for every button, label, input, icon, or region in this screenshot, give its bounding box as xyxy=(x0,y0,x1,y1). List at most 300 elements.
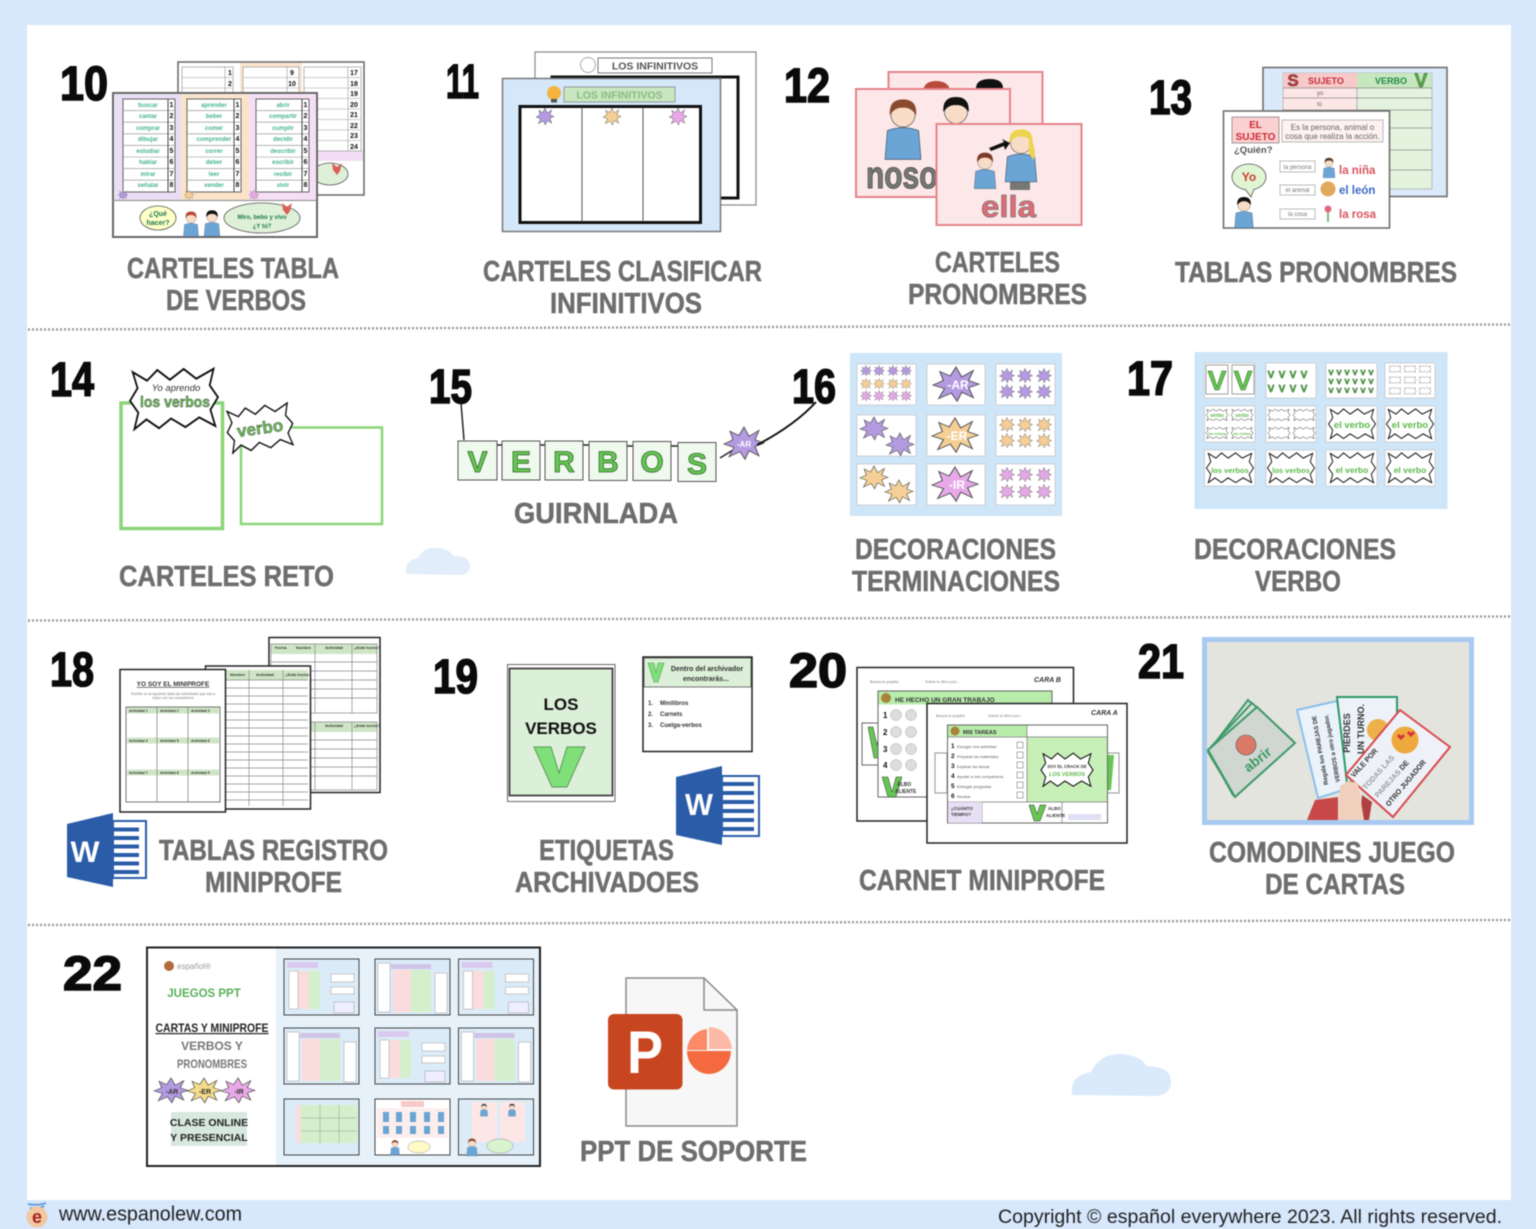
card side A: MIS TAREAS xyxy=(963,730,997,736)
verb list: 1 xyxy=(304,102,308,109)
label 18: TABLAS REGISTRO xyxy=(159,835,388,867)
contents label: 1. xyxy=(648,701,653,707)
photo: PIERDES xyxy=(1342,713,1352,753)
V cards: V xyxy=(1360,377,1366,386)
V cards: V xyxy=(1344,386,1350,395)
big stars: -AR xyxy=(947,378,969,392)
small burst cards xyxy=(1206,366,1434,483)
front card: la niña xyxy=(1339,165,1376,177)
sheet back right: Nombre xyxy=(296,645,312,650)
verb list: cumplir xyxy=(272,126,294,132)
sheet grid: el verbo xyxy=(1336,465,1368,475)
footer copyright: Copyright © español everywhere 2023. All rights reserved. xyxy=(998,1206,1502,1228)
verb list: comprender xyxy=(197,137,232,143)
back poster: LOS INFINITIVOS xyxy=(612,60,698,72)
label 17: VERBO xyxy=(1255,566,1341,598)
garland letters: E xyxy=(511,446,531,479)
back poster: 10 xyxy=(288,81,296,88)
verb list: dibujar xyxy=(138,137,159,143)
verb list: buscar xyxy=(138,103,158,109)
verb list: comer xyxy=(205,126,224,132)
V cards: V xyxy=(1268,370,1275,381)
photo xyxy=(1204,640,1472,822)
contents label: 2. xyxy=(648,712,653,718)
card side B xyxy=(857,668,1074,821)
label 11: INFINITIVOS xyxy=(550,288,702,320)
sheet back middle xyxy=(206,666,312,809)
back table: tú xyxy=(1317,102,1322,108)
label spine: LOS xyxy=(544,695,578,714)
verb list: decidir xyxy=(273,137,293,143)
verb list: 8 xyxy=(236,182,240,189)
dialogue: ¿Qué xyxy=(149,211,167,218)
card side A: SOY EL CRACK DE xyxy=(1047,764,1087,769)
front card: la cosa xyxy=(1288,212,1308,218)
verb list: 2 xyxy=(170,113,174,120)
card side A: ALIENTE xyxy=(1046,813,1065,818)
card side A: Ayudar a mis compañeros xyxy=(957,774,1003,779)
label 12: CARTELES xyxy=(935,247,1060,279)
item 14: carteles reto xyxy=(50,354,382,593)
arrow to star xyxy=(757,402,816,445)
verb list: abrir xyxy=(276,103,290,109)
card side B: ÁLBO xyxy=(897,781,911,788)
verb list: 4 xyxy=(304,136,308,143)
front card: SUJETO xyxy=(1236,132,1276,143)
sheet back right: Fecha xyxy=(275,645,287,650)
V cards: V xyxy=(1234,365,1253,396)
verb list: comprar xyxy=(136,126,161,132)
verb list: vender xyxy=(204,183,224,189)
sheet back middle: Actividad xyxy=(256,672,275,677)
blue card xyxy=(1297,701,1350,798)
front card: la rosa xyxy=(1339,209,1377,221)
card: nosotros xyxy=(856,89,1010,197)
hand xyxy=(1307,797,1338,820)
sheet back right: Actividad xyxy=(325,723,344,728)
verb list: 3 xyxy=(236,125,240,132)
slide sheet xyxy=(147,948,540,1166)
back table: S xyxy=(1287,71,1299,90)
verb list: hablar xyxy=(139,160,158,166)
icon: word: W xyxy=(70,836,100,869)
mini stars xyxy=(118,190,259,200)
verb list: beber xyxy=(206,114,223,120)
back poster: 18 xyxy=(350,81,358,88)
V cards: V xyxy=(1360,386,1366,395)
sheet back middle: Nombre xyxy=(230,672,246,677)
verb list: 4 xyxy=(236,136,240,143)
label 11 xyxy=(483,256,762,320)
V cards: V xyxy=(1290,370,1297,381)
verb list: 3 xyxy=(170,125,174,132)
verb list: señalar xyxy=(137,183,159,189)
back poster: 20 xyxy=(350,102,358,109)
V cards: V xyxy=(1368,368,1374,377)
label 10: DE VERBOS xyxy=(166,285,306,317)
sheet back right: Actividad xyxy=(325,645,344,650)
photo: abrir xyxy=(1240,743,1275,775)
card side B: Busca tu pupitre xyxy=(870,679,900,684)
V cards: V xyxy=(1290,384,1297,395)
front poster xyxy=(113,93,317,237)
sheet front: Actividad 1 xyxy=(129,709,148,713)
verb list: 2 xyxy=(304,113,308,120)
V cards: V xyxy=(1368,377,1374,386)
footer logo xyxy=(26,1203,48,1228)
verb list: 7 xyxy=(236,171,240,178)
sheet front: Actividad 7 xyxy=(129,771,148,775)
sheet back middle: ¿Está hecha? xyxy=(285,672,312,677)
sheet back right xyxy=(269,638,381,792)
green card stack xyxy=(1208,700,1295,797)
label 11: CARTELES CLASIFICAR xyxy=(483,256,762,288)
thumbnails xyxy=(284,959,534,1156)
slide stars: -AR xyxy=(166,1089,178,1096)
item 13: tablas pronombres xyxy=(1149,68,1457,289)
verb list: correr xyxy=(205,149,223,155)
label 16: DECORACIONES xyxy=(855,534,1056,566)
back poster: 23 xyxy=(350,133,358,140)
card side A: Entregar preguntas xyxy=(957,784,991,789)
V cards: V xyxy=(1360,368,1366,377)
V cards xyxy=(1206,365,1374,396)
back table: V xyxy=(1415,71,1428,92)
V cards: V xyxy=(1352,377,1358,386)
burst: verbo xyxy=(224,402,296,453)
big stars xyxy=(860,367,979,503)
number 17: 17 xyxy=(1127,353,1173,406)
sheet front: Escribe en la siguiente tabla las actividades que vas a xyxy=(131,692,215,696)
verb list: deber xyxy=(206,160,223,166)
sheet front: Actividad 4 xyxy=(129,739,148,743)
label 18 xyxy=(159,835,388,899)
card side A: Busca tu pupitre xyxy=(936,713,966,718)
number 13: 13 xyxy=(1149,72,1192,125)
card side B: Sobre tu libro pon... xyxy=(925,679,960,684)
verb list: estudiar xyxy=(136,149,160,155)
card side A: ÁLBO xyxy=(1048,805,1061,811)
card side A: Explicar las tareas xyxy=(957,764,990,769)
number 11: 11 xyxy=(446,56,479,109)
item 18: tablas registro miniprofe xyxy=(50,638,388,899)
back card xyxy=(888,72,1042,132)
number 14: 14 xyxy=(50,354,94,407)
verb list: 1 xyxy=(170,102,174,109)
burst: los verbos: Yo aprendo xyxy=(152,383,200,394)
slide text: VERBOS Y xyxy=(181,1039,243,1053)
photo: VALE POR xyxy=(1349,746,1380,779)
V cards: V xyxy=(1279,370,1286,381)
verb list xyxy=(136,102,308,189)
card side B: 1 xyxy=(883,711,888,720)
card side B: ALIENTE xyxy=(895,789,917,795)
big stars: -ER xyxy=(947,429,968,443)
photo: UN TURNO. xyxy=(1356,704,1366,754)
card: ella: ella xyxy=(981,189,1037,224)
item 20: carnet miniprofe xyxy=(789,645,1127,897)
V cards: V xyxy=(1328,377,1334,386)
label 16: TERMINACIONES xyxy=(852,566,1060,598)
back poster: 19 xyxy=(350,91,358,98)
label 18: MINIPROFE xyxy=(205,867,342,899)
contents label: encontrarás... xyxy=(683,676,729,683)
verb list: 6 xyxy=(304,159,308,166)
label 16 xyxy=(852,534,1060,598)
V cards: V xyxy=(1328,368,1334,377)
card side A: 6 xyxy=(951,793,955,800)
card 1 stars xyxy=(860,365,912,401)
slide stars: -ER xyxy=(199,1089,211,1096)
back table: yo xyxy=(1317,91,1324,97)
back poster: 9 xyxy=(290,70,294,77)
item 12: carteles pronombres xyxy=(784,60,1087,311)
label 19 xyxy=(515,835,699,899)
item 17: decoraciones verbo xyxy=(1127,352,1448,598)
label 14: CARTELES RETO xyxy=(119,561,334,593)
verb list: 8 xyxy=(304,182,308,189)
sheet grid: los verbos xyxy=(1272,466,1310,475)
sheet front: Actividad 6 xyxy=(191,739,210,743)
item 15: guirnalda xyxy=(429,361,764,530)
sheet front: hacer con tus compañeros xyxy=(152,696,194,700)
label 13: TABLAS PRONOMBRES xyxy=(1175,257,1457,289)
card side A: ¿CUÁNTO xyxy=(951,805,973,811)
V cards: V xyxy=(1352,368,1358,377)
verb list: describir xyxy=(270,149,296,155)
photo: PAREJAS DE xyxy=(1373,758,1411,799)
card side A: CARA A xyxy=(1091,710,1118,717)
verb list: 4 xyxy=(170,136,174,143)
photo: Regala tus PAREJAS DE xyxy=(1312,715,1330,785)
label 12 xyxy=(908,247,1087,311)
V cards: V xyxy=(1352,386,1358,395)
garland string xyxy=(461,403,733,458)
back poster: 1 xyxy=(228,70,232,77)
photo: VERBOS a otro jugador. xyxy=(1324,714,1342,783)
back poster xyxy=(178,62,364,195)
slide stars: -IR xyxy=(234,1089,244,1096)
star AR: -AR xyxy=(737,440,751,449)
sheet front: Actividad 8 xyxy=(160,771,179,775)
big stars: -IR xyxy=(949,478,965,492)
burst: los verbos xyxy=(129,368,219,429)
back poster: 17 xyxy=(350,70,358,77)
number 15: 15 xyxy=(429,361,472,414)
sheet grid: el verbo xyxy=(1392,420,1428,431)
front card: cosa que realiza la acción. xyxy=(1285,132,1380,141)
front card: Es la persona, animal o xyxy=(1291,123,1375,132)
V cards: V xyxy=(1336,386,1342,395)
card side B: HE HECHO UN GRAN TRABAJO xyxy=(895,697,995,704)
verb list: 7 xyxy=(170,171,174,178)
sheet front: YO SOY EL MINIPROFE xyxy=(137,681,210,688)
dialogue: ¿Y tú? xyxy=(253,224,272,230)
card side A: Preparar los materiales xyxy=(957,754,998,759)
number 20: 20 xyxy=(789,645,847,698)
V cards: V xyxy=(1279,384,1286,395)
item 22: ppt de soporte xyxy=(63,948,807,1168)
sheet grid: el verbo xyxy=(1334,420,1370,431)
item 10: carteles tabla de verbos xyxy=(60,58,364,317)
number 21: 21 xyxy=(1138,636,1184,689)
slide sheet: Y PRESENCIAL xyxy=(170,1132,248,1144)
sheet grid: los verbos xyxy=(1233,432,1251,436)
card side A: 2 xyxy=(951,753,955,760)
sheet grid xyxy=(1194,352,1448,509)
green card xyxy=(1337,697,1397,783)
sheet grid xyxy=(850,353,1062,516)
front poster: LOS INFINITIVOS xyxy=(576,90,663,102)
poster landscape xyxy=(241,428,382,524)
slide text: PRONOMBRES xyxy=(177,1057,247,1071)
verb list: mirar xyxy=(140,172,156,178)
card side A xyxy=(927,704,1127,843)
photo: OTRO JUGADOR xyxy=(1384,758,1428,808)
front card xyxy=(1224,111,1390,228)
front card: Yo xyxy=(1242,170,1256,184)
card side A: 3 xyxy=(951,763,955,770)
sheet front: Actividad 3 xyxy=(191,709,210,713)
dialogue: hacer? xyxy=(147,220,169,227)
card side A: TIEMPO? xyxy=(951,812,971,817)
garland letters xyxy=(458,441,716,482)
label 20: CARNET MINIPROFE xyxy=(859,865,1105,897)
card side B: 4 xyxy=(883,761,888,770)
V cards: V xyxy=(1336,368,1342,377)
front card: ¿Quién? xyxy=(1234,145,1273,156)
front card: el animal xyxy=(1285,188,1310,194)
sheet grid: los verbos xyxy=(1208,432,1226,436)
contents label xyxy=(643,657,752,752)
card side A: 5 xyxy=(951,783,955,790)
item 11: carteles clasificar infinitivos xyxy=(446,52,762,320)
verb list: 3 xyxy=(304,125,308,132)
back poster: 21 xyxy=(350,112,358,119)
sheet front: Actividad 2 xyxy=(160,709,179,713)
verb list: 7 xyxy=(304,171,308,178)
verb list: 5 xyxy=(236,148,240,155)
back poster: 24 xyxy=(350,144,358,151)
sheet back right: ¿Está hecha? xyxy=(354,645,381,650)
front card: EL xyxy=(1249,120,1262,131)
verb list: recibir xyxy=(274,172,293,178)
label 10 xyxy=(127,253,339,317)
sheet grid: el verbo xyxy=(1394,465,1426,475)
verb list: escribir xyxy=(272,160,295,166)
V cards: V xyxy=(1328,386,1334,395)
garland letters: B xyxy=(597,446,619,479)
garland letters: R xyxy=(553,446,575,479)
label 21: COMODINES JUEGO xyxy=(1209,837,1455,869)
sheet front: Actividad 9 xyxy=(191,771,210,775)
garland letters: V xyxy=(467,446,488,479)
back poster: 2 xyxy=(228,81,232,88)
icon: word: W xyxy=(685,787,714,822)
V cards: V xyxy=(1368,386,1374,395)
back table xyxy=(1263,68,1447,196)
number 16: 16 xyxy=(792,361,836,414)
sheet front xyxy=(120,670,226,812)
verb list: 1 xyxy=(236,102,240,109)
cloud: left xyxy=(406,548,470,575)
contents label: 3. xyxy=(648,723,653,729)
back table: SUJETO xyxy=(1308,76,1344,86)
V cards: V xyxy=(1208,365,1227,396)
label 21: DE CARTAS xyxy=(1265,869,1405,901)
slide text xyxy=(156,988,268,1071)
V cards: V xyxy=(1301,370,1308,381)
label 15: GUIRNLADA xyxy=(514,498,678,530)
footer logo: e xyxy=(32,1207,42,1227)
footer website: www.espanolew.com xyxy=(58,1204,242,1226)
label spine xyxy=(508,664,615,802)
verb list: 6 xyxy=(236,159,240,166)
label spine: VERBOS xyxy=(525,719,597,738)
verb list: vivir xyxy=(277,183,290,189)
card side A: Revisar xyxy=(957,794,971,799)
card side A: Escoger una actividad xyxy=(957,744,996,749)
photo: TODAS LAS xyxy=(1361,753,1396,791)
card side B: 2 xyxy=(883,728,888,737)
cloud: right xyxy=(1072,1054,1171,1096)
number 19: 19 xyxy=(433,651,478,704)
label 10: CARTELES TABLA xyxy=(127,253,339,285)
sheet grid: verbo xyxy=(1210,413,1224,419)
card side B: CARA B xyxy=(1034,677,1061,684)
dialogue xyxy=(140,203,300,236)
six-star cards xyxy=(999,368,1052,399)
slide sheet: español® xyxy=(177,962,211,971)
slide sheet: CLASE ONLINE xyxy=(170,1117,248,1129)
poster portrait xyxy=(121,403,222,528)
sheet front: Actividad 5 xyxy=(160,739,179,743)
label 19: ARCHIVADOES xyxy=(515,867,699,899)
contents label: Dentro del archivador xyxy=(671,666,743,673)
card side A: 4 xyxy=(951,773,955,780)
verb list: 8 xyxy=(170,182,174,189)
label 17 xyxy=(1194,534,1396,598)
icon: powerpoint: P xyxy=(627,1019,663,1086)
back table: VERBO xyxy=(1375,76,1407,86)
contents label: Carnets xyxy=(660,712,683,718)
verb list: cantar xyxy=(139,114,158,120)
item 16: decoraciones terminaciones xyxy=(757,353,1062,598)
label 19: ETIQUETAS xyxy=(539,835,674,867)
card side A: 1 xyxy=(951,743,955,750)
contents label: Cuelga-verbos xyxy=(660,723,702,729)
verb list: 5 xyxy=(304,148,308,155)
verb list: 2 xyxy=(236,113,240,120)
V cards: V xyxy=(1336,377,1342,386)
burst: los verbos: los verbos xyxy=(140,394,210,411)
sheet back right: ¿Está hecha? xyxy=(354,723,381,728)
card: nosotros: nosotros xyxy=(866,155,994,197)
contents label: Minilibros xyxy=(660,701,689,707)
verb list: compartir xyxy=(269,114,297,120)
card side A: Sobre tu libro pon... xyxy=(988,713,1023,718)
star AR xyxy=(724,427,764,459)
verb list: 5 xyxy=(170,148,174,155)
number 12: 12 xyxy=(784,60,830,113)
back poster xyxy=(535,52,756,205)
label 22: PPT DE SOPORTE xyxy=(580,1136,807,1168)
slide stars xyxy=(154,1078,255,1103)
front poster xyxy=(502,78,720,232)
sheet grid: verbo xyxy=(1235,413,1249,419)
front card: la persona xyxy=(1283,165,1312,171)
verb list: 6 xyxy=(170,159,174,166)
